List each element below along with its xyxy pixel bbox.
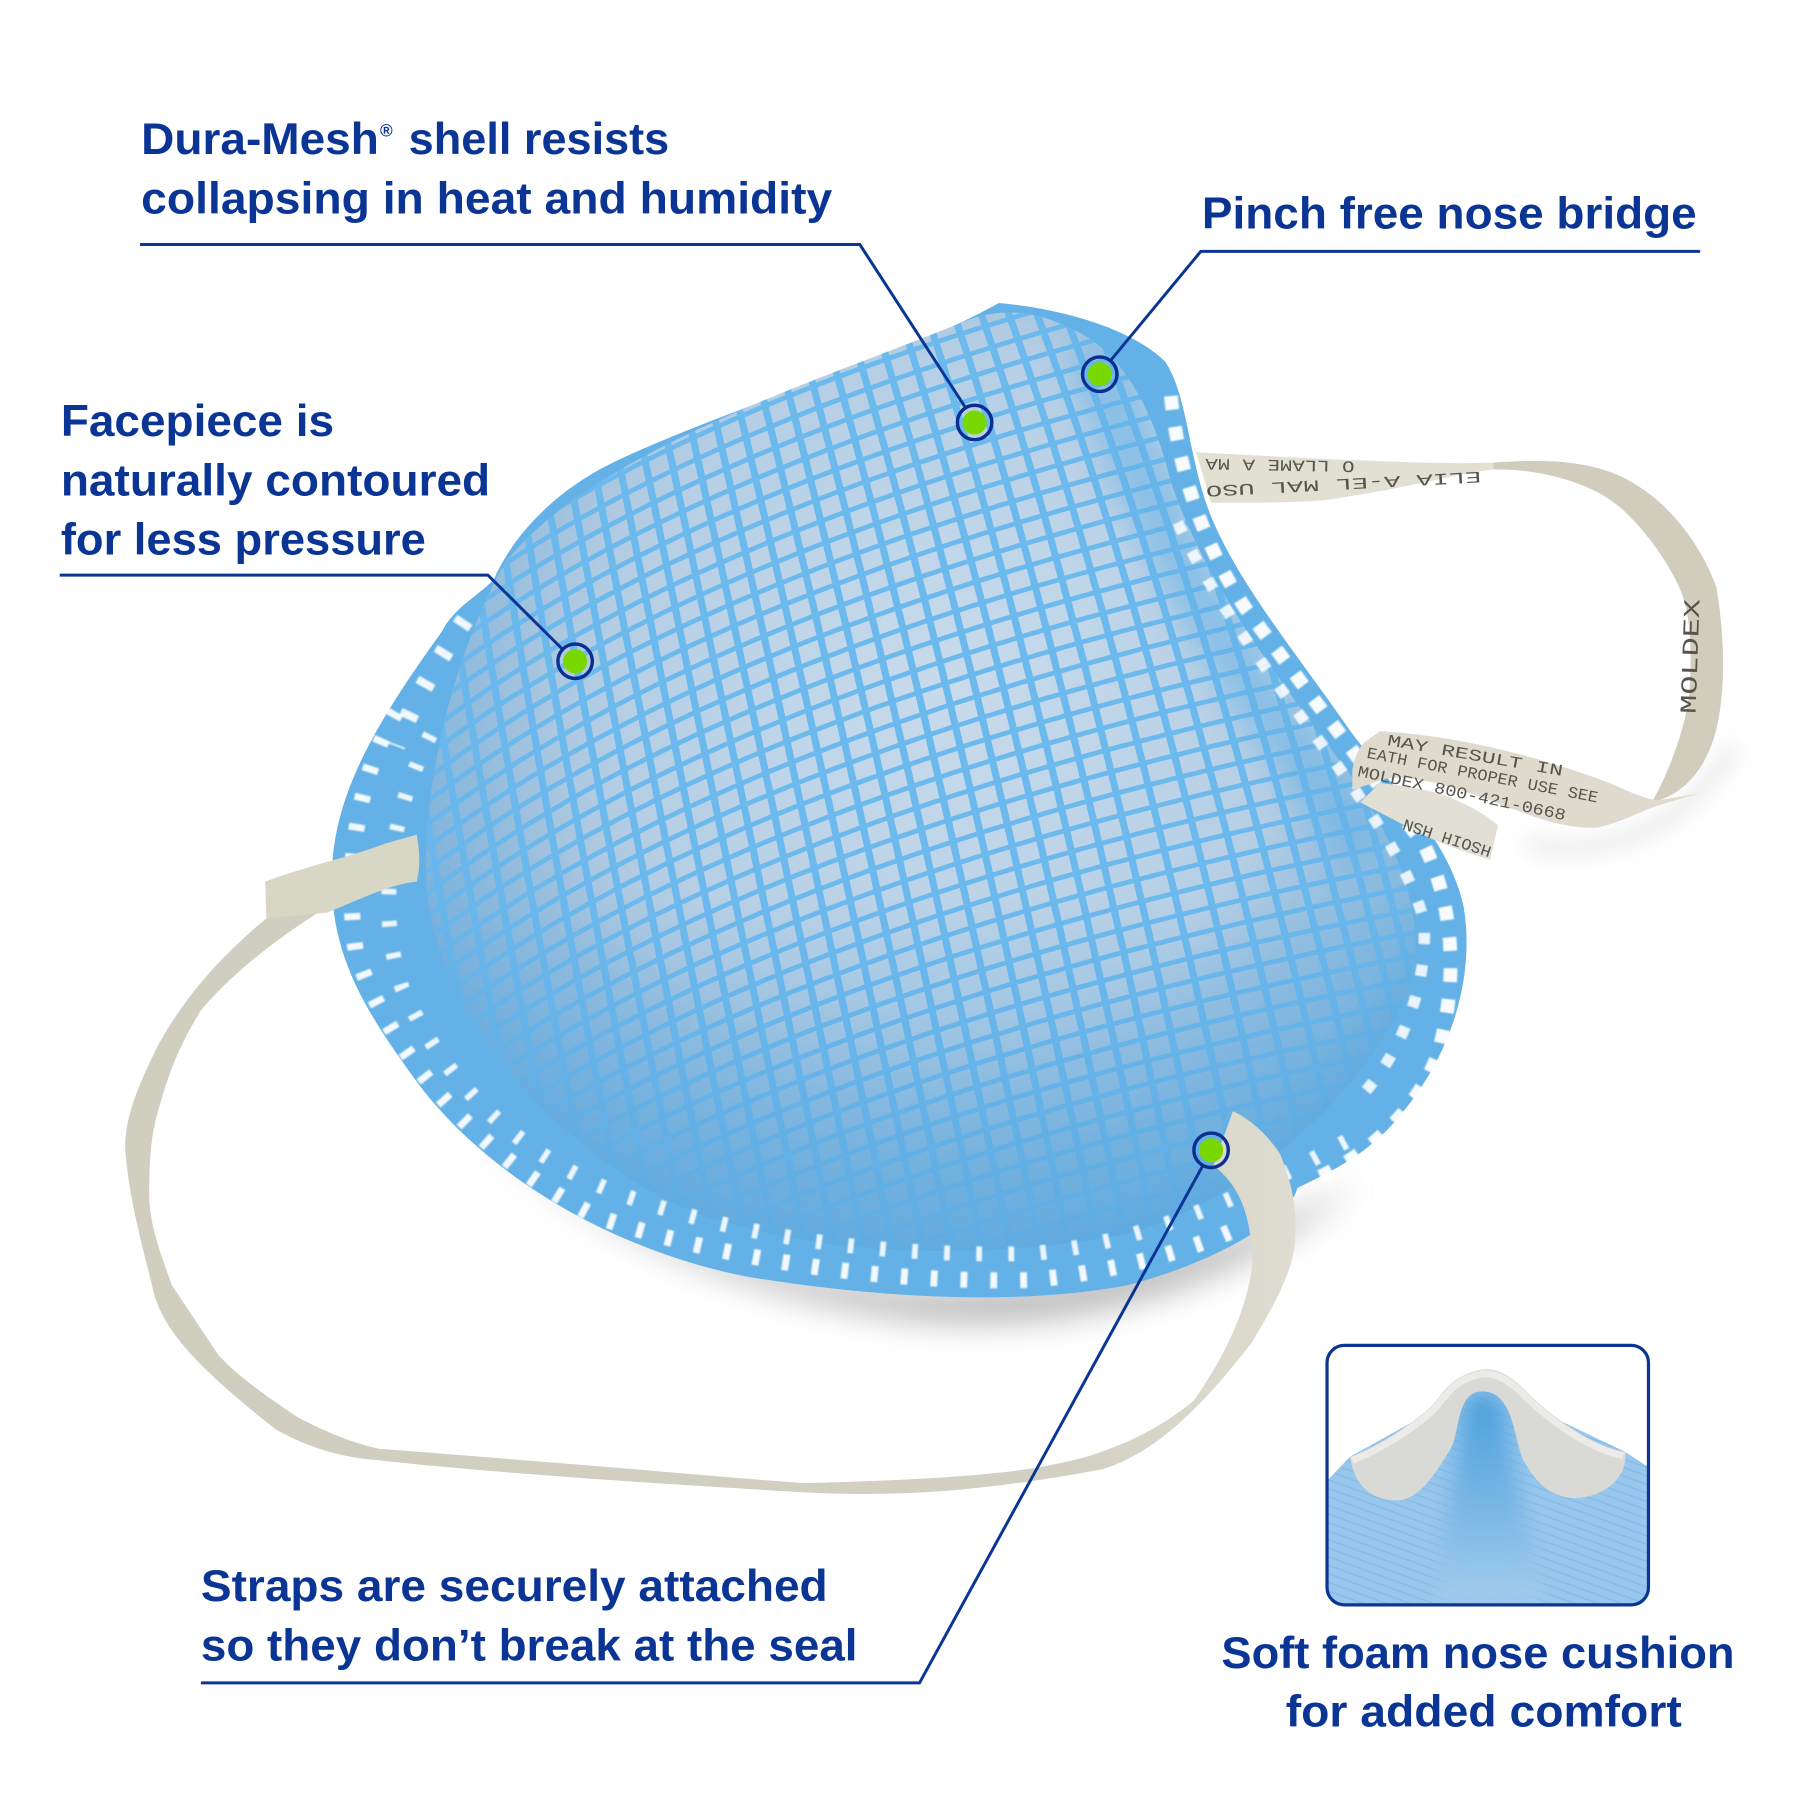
brim holes xyxy=(352,396,1451,1280)
heading: dura-mesh word: Dura-Mesh xyxy=(141,114,379,164)
foam cushion xyxy=(1350,1369,1626,1500)
holes: right inner row xyxy=(1178,522,1424,1091)
text: short strap print: HSOIH HSN xyxy=(1401,814,1494,860)
heading: line two: collapsing in heat and humidity xyxy=(141,174,832,224)
mesh ribs steep xyxy=(427,312,1412,1232)
foam top edge highlight xyxy=(1352,1374,1623,1460)
text: strap brand: MOLDEX xyxy=(1677,598,1707,714)
nose crease shading xyxy=(1091,344,1366,849)
mesh grid xyxy=(426,312,1415,1251)
leader line xyxy=(1111,251,1700,360)
callout: straps xyxy=(201,1133,1228,1683)
heading line two: so they don’t break at the seal xyxy=(201,1621,858,1671)
heading line two: naturally contoured xyxy=(61,455,490,505)
mask ground shadow xyxy=(459,1102,1355,1323)
mesh rows shallow xyxy=(426,313,1415,1232)
heading line one: Straps are securely attached xyxy=(201,1561,828,1611)
label loop in front of shell xyxy=(1352,731,1701,860)
front strap loop xyxy=(125,907,1295,1494)
holes: upper left row xyxy=(396,620,465,746)
text: upper strap print: ELIA A-EL MAL USO xyxy=(1205,467,1482,499)
heading: Pinch free nose bridge xyxy=(1202,188,1697,238)
caption line two: for added comfort xyxy=(1286,1687,1682,1737)
lower dome saturation overlay xyxy=(502,941,1352,1251)
inset frame xyxy=(1327,1345,1648,1605)
band: outer right strap xyxy=(1493,461,1723,800)
leader line xyxy=(60,575,562,649)
marker dot xyxy=(1083,357,1117,391)
inset photo xyxy=(1327,1369,1648,1605)
text: label print line one: MAY RESULT IN xyxy=(1386,732,1564,781)
band: short strap end xyxy=(1360,783,1498,860)
band: upper printed strap xyxy=(1196,452,1495,503)
holes: bottom inner row xyxy=(389,735,1355,1254)
inner dome cells xyxy=(426,312,1415,1251)
heading line three: for less pressure xyxy=(61,514,426,564)
fabric weave xyxy=(1327,1383,1648,1605)
brim xyxy=(332,303,1467,1297)
edge saturation overlay xyxy=(426,529,1415,1251)
caption line one: Soft foam nose cushion xyxy=(1221,1628,1735,1678)
text: upper strap print line two: O LLAME A MA xyxy=(1205,454,1355,474)
inset: foam nose cushion xyxy=(1221,1345,1735,1737)
strap attachment flap left xyxy=(265,835,419,918)
mask inner fabric xyxy=(1327,1383,1648,1605)
mask shell xyxy=(332,303,1467,1298)
leader line xyxy=(201,1165,1203,1683)
registered mark: ® xyxy=(380,121,393,141)
nose centre crease xyxy=(1435,1391,1544,1605)
text: label print line two: EATH FOR PROPER USE SEE xyxy=(1365,745,1600,807)
marker dot xyxy=(558,644,592,678)
band: lower label loop xyxy=(1352,731,1701,828)
callout: nose bridge xyxy=(1083,188,1700,391)
leader line xyxy=(140,245,965,408)
callout: facepiece xyxy=(60,396,592,678)
holes: right outer row xyxy=(1171,396,1451,1177)
heading line one: Facepiece is xyxy=(61,396,334,446)
callout: dura-mesh shell xyxy=(140,114,992,440)
marker dot xyxy=(957,405,992,440)
marker dot xyxy=(1194,1133,1228,1167)
strap shadow xyxy=(1527,746,1733,848)
back strap right xyxy=(1196,452,1723,800)
text: label print line three: MOLDEX 800-421-0668 xyxy=(1356,763,1567,825)
holes: bottom outer row xyxy=(352,712,1291,1280)
heading: line one rest: shell resists xyxy=(409,114,669,164)
